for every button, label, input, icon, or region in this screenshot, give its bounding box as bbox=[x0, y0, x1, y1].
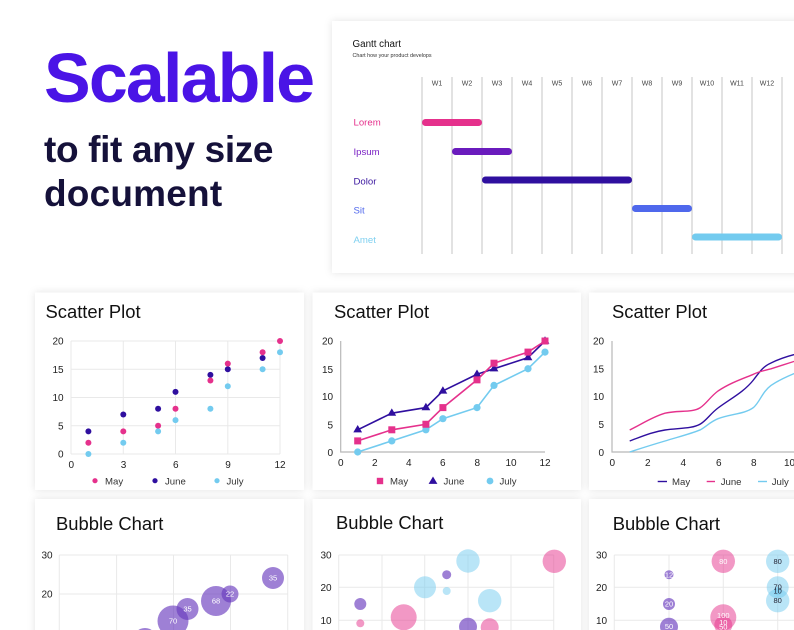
y axis labels: 5 bbox=[598, 420, 604, 431]
panel: smooth line chart bbox=[589, 292, 794, 490]
legend: May bbox=[105, 476, 123, 488]
x axis labels bbox=[68, 460, 286, 471]
y axis labels: 10 bbox=[322, 392, 334, 403]
y axis labels bbox=[322, 336, 334, 459]
row: Lorem: Lorem bbox=[354, 118, 381, 128]
bubbles: 10 bbox=[774, 586, 782, 596]
x axis labels: 8 bbox=[474, 458, 480, 469]
row: Lorem bbox=[354, 118, 482, 128]
x axis labels: 4 bbox=[406, 458, 412, 469]
bubble title: Bubble Chart bbox=[613, 513, 720, 534]
panel: bubble chart one bbox=[35, 499, 304, 630]
row: Ipsum bbox=[354, 147, 512, 158]
bubbles bbox=[660, 550, 789, 630]
scatter title: Scatter Plot bbox=[612, 301, 707, 322]
legend: May bbox=[672, 477, 690, 488]
row: Amet bbox=[354, 234, 782, 246]
y axis labels: 5 bbox=[328, 420, 334, 432]
week labels: W3 bbox=[492, 80, 502, 88]
panel: bubble chart two bbox=[312, 499, 581, 630]
week labels: W1 bbox=[432, 80, 442, 88]
series: July curve bbox=[630, 369, 794, 452]
legend: June bbox=[444, 476, 464, 488]
y axis labels: 10 bbox=[52, 393, 64, 404]
bubbles: 35 bbox=[269, 574, 277, 582]
y axis labels: 15 bbox=[593, 364, 605, 376]
x axis labels: 9 bbox=[225, 460, 231, 471]
week labels: W2 bbox=[462, 80, 472, 88]
heading block bbox=[44, 39, 313, 214]
week labels: W11 bbox=[730, 80, 744, 88]
x axis labels: 0 bbox=[610, 458, 616, 469]
y axis labels: 10 bbox=[320, 616, 332, 627]
legend: June bbox=[165, 476, 186, 488]
y axis labels: 30 bbox=[596, 550, 608, 562]
y axis labels bbox=[593, 336, 605, 459]
gantt heading: Gantt chart bbox=[352, 39, 401, 50]
x axis labels: 6 bbox=[716, 458, 722, 469]
week labels: W12 bbox=[760, 80, 774, 88]
x axis labels: 0 bbox=[338, 458, 344, 469]
y axis labels bbox=[42, 550, 53, 600]
bubbles: 100 bbox=[717, 611, 730, 620]
subtitle line two: document bbox=[44, 173, 222, 214]
y axis labels: 0 bbox=[328, 448, 334, 459]
y axis labels: 20 bbox=[593, 336, 605, 348]
bubbles: 70 bbox=[169, 616, 177, 626]
bubble title: Bubble Chart bbox=[56, 513, 163, 534]
bubbles: 68 bbox=[212, 596, 220, 606]
row: Sit: Sit bbox=[354, 206, 365, 216]
y axis labels: 15 bbox=[52, 365, 64, 376]
row: Sit bbox=[354, 205, 692, 216]
panel: scatter plot lines bbox=[312, 292, 581, 490]
series: May line bbox=[354, 338, 548, 444]
panel: gantt chart bbox=[332, 21, 794, 273]
bubbles: 70 bbox=[774, 582, 782, 592]
week labels: W7 bbox=[612, 80, 622, 88]
y axis labels bbox=[596, 550, 608, 627]
series: July dots bbox=[85, 349, 283, 457]
y axis labels: 5 bbox=[58, 422, 64, 432]
legend bbox=[92, 476, 244, 488]
scatter title: Scatter Plot bbox=[334, 301, 429, 322]
row: Ipsum: Ipsum bbox=[354, 147, 380, 158]
y axis labels: 20 bbox=[322, 336, 334, 348]
legend: May bbox=[390, 476, 408, 488]
bubbles bbox=[133, 567, 284, 630]
x axis labels: 10 bbox=[506, 458, 517, 469]
legend: July bbox=[226, 476, 244, 488]
bubbles: 22 bbox=[226, 590, 234, 598]
y axis labels: 20 bbox=[596, 583, 608, 594]
panel: bubble chart three bbox=[589, 499, 794, 630]
week labels bbox=[432, 80, 774, 88]
row: Dolor: Dolor bbox=[354, 176, 377, 188]
y axis labels: 15 bbox=[322, 365, 334, 376]
x axis labels: 6 bbox=[440, 458, 446, 469]
series: July line bbox=[354, 348, 549, 456]
series: May curve bbox=[630, 352, 794, 441]
bubble title: Bubble Chart bbox=[336, 512, 443, 533]
y axis labels: 30 bbox=[42, 550, 53, 562]
legend: July bbox=[500, 476, 517, 488]
series: May dots bbox=[85, 338, 283, 446]
y axis labels: 20 bbox=[42, 590, 53, 600]
panel: scatter plot dots bbox=[35, 292, 304, 490]
x axis labels bbox=[610, 458, 794, 469]
bubbles: 80 bbox=[774, 596, 782, 605]
x axis labels: 12 bbox=[274, 460, 286, 471]
week labels: W8 bbox=[642, 80, 652, 88]
bubbles: 35 bbox=[183, 604, 192, 614]
series: June dots bbox=[85, 355, 266, 434]
week labels: W10 bbox=[700, 80, 714, 88]
bubbles: 20 bbox=[665, 600, 673, 608]
week labels: W5 bbox=[552, 80, 562, 88]
x axis labels: 2 bbox=[645, 458, 651, 469]
x axis labels: 4 bbox=[680, 458, 686, 469]
bubbles: 80 bbox=[774, 557, 782, 566]
y axis labels: 30 bbox=[320, 550, 332, 562]
legend: June bbox=[721, 477, 742, 488]
y axis labels: 10 bbox=[596, 616, 608, 627]
y axis labels: 10 bbox=[593, 392, 605, 403]
row: Dolor bbox=[354, 176, 632, 188]
week labels: W6 bbox=[582, 80, 592, 88]
gantt subheading: Chart how your product develops bbox=[352, 53, 432, 59]
bubbles: 10 bbox=[719, 618, 727, 627]
week labels: W9 bbox=[672, 80, 682, 88]
x axis labels: 0 bbox=[68, 460, 74, 471]
x axis labels: 6 bbox=[173, 460, 179, 471]
row: Amet: Amet bbox=[354, 235, 376, 246]
x axis labels: 8 bbox=[751, 458, 757, 469]
y axis labels: 0 bbox=[598, 448, 604, 459]
x axis labels: 3 bbox=[121, 460, 127, 471]
scatter title: Scatter Plot bbox=[46, 301, 141, 322]
legend bbox=[377, 476, 517, 488]
y axis labels: 0 bbox=[58, 450, 64, 460]
y axis labels bbox=[320, 550, 332, 627]
week labels: W4 bbox=[522, 80, 532, 88]
x axis labels bbox=[338, 458, 551, 469]
subtitle line one: to fit any size bbox=[44, 129, 273, 170]
y axis labels: 20 bbox=[320, 583, 332, 594]
x axis labels: 12 bbox=[540, 458, 551, 469]
bubbles: 80 bbox=[719, 557, 727, 566]
series: June curve bbox=[630, 358, 794, 430]
legend bbox=[658, 477, 789, 488]
legend: July bbox=[772, 477, 789, 488]
x axis labels: 2 bbox=[372, 458, 378, 469]
series: June line bbox=[353, 336, 549, 432]
title: Scalable: Scalable bbox=[44, 39, 313, 117]
y axis labels bbox=[52, 336, 64, 460]
y axis labels: 20 bbox=[52, 336, 64, 348]
bubbles: 12 bbox=[665, 570, 673, 579]
bubbles bbox=[354, 549, 566, 630]
